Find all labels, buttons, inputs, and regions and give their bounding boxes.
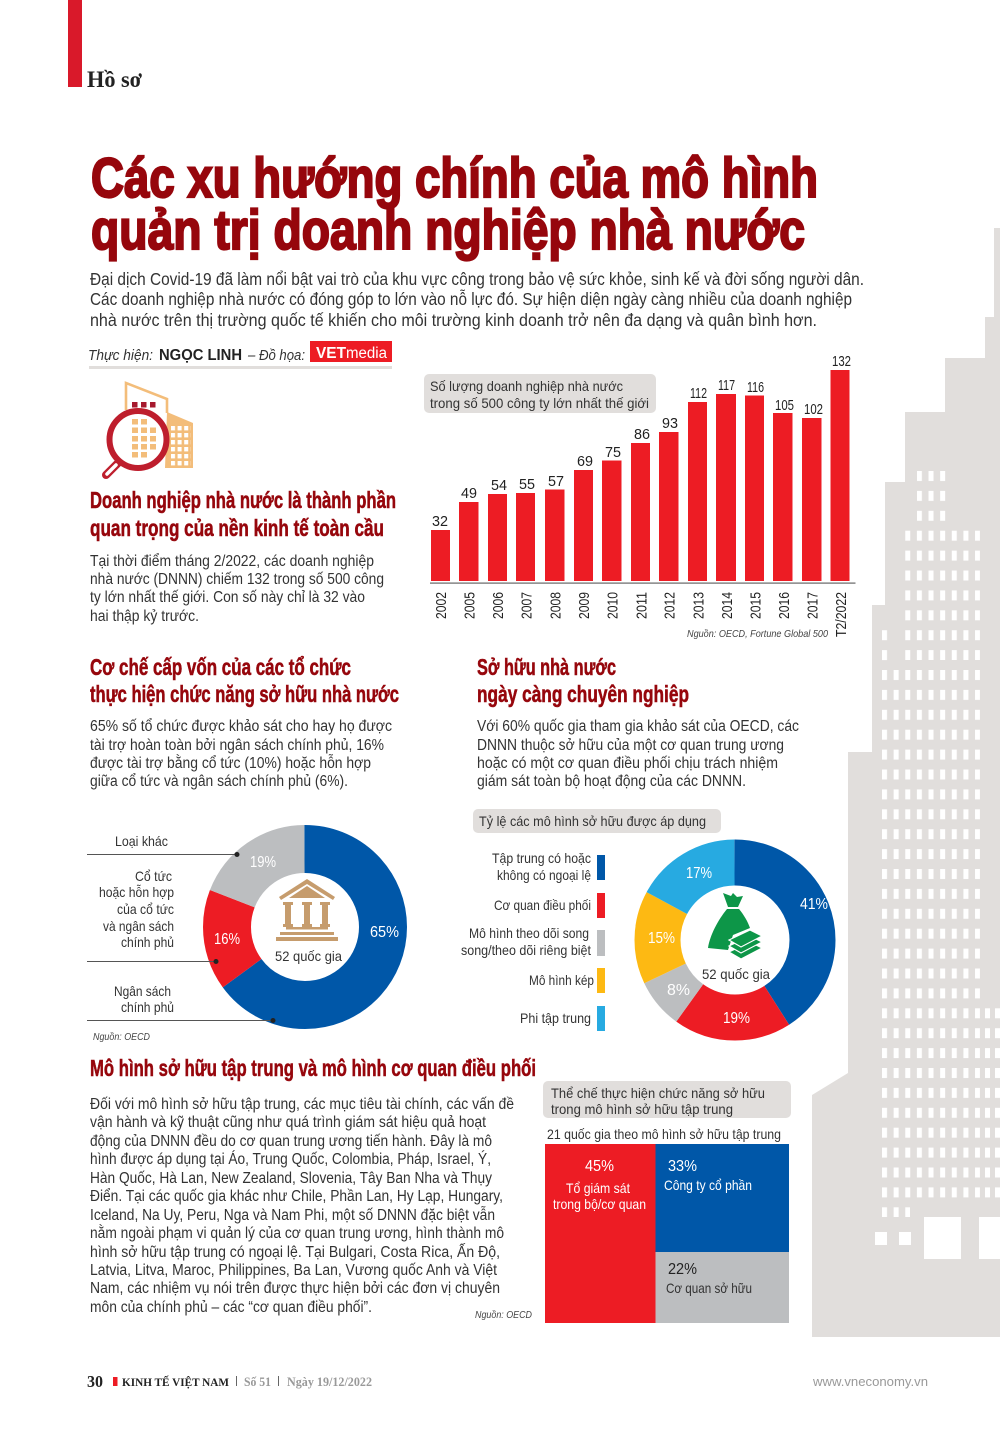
text block: state enterprises: nhà nước (DNNN) chiếm 132 trong số 500 công <box>90 571 384 588</box>
text block: state enterprises: Tại thời điểm tháng 2/2022, các doanh nghiệp <box>90 553 374 570</box>
donut chart: ownership models: 17% <box>686 865 712 882</box>
heading: funding mechanism: thực hiện chức năng sở hữu nhà nước <box>90 681 399 707</box>
bar values: 57 <box>548 474 564 490</box>
year axis labels: 2007 <box>520 592 536 619</box>
bar values: 132 <box>832 354 851 370</box>
heading: state enterprises: Doanh nghiệp nhà nước là thành phần <box>90 487 396 513</box>
year axis labels: 2002 <box>434 592 450 619</box>
legend: Mô hình kép <box>529 972 594 988</box>
donut chart: funding sources: 19% <box>250 854 276 871</box>
bars <box>431 370 850 581</box>
chart label: Tỷ lệ các mô hình sở hữu được áp dụng <box>479 813 706 829</box>
cell: 22%: 22% <box>668 1261 697 1278</box>
text block: centralized model: hình sở hữu tập trung có ngoại lệ. Tại Bulgari, Costa Rica, Ấn Độ, <box>90 1244 500 1261</box>
chart label <box>543 1081 791 1118</box>
callout: state budget <box>87 983 276 1023</box>
cell: 33%: 33% <box>668 1158 697 1175</box>
heading: professional ownership: Sở hữu nhà nước <box>477 654 616 680</box>
year axis labels: 2014 <box>720 592 736 619</box>
icon: money bag <box>708 893 762 959</box>
bar values: 54 <box>491 478 507 494</box>
donut chart: ownership models: 15% <box>648 930 675 947</box>
bar values: 102 <box>804 402 823 418</box>
source: centralized model: Nguồn: OECD <box>475 1309 532 1321</box>
heading: state enterprises <box>90 487 396 541</box>
heading: funding mechanism: Cơ chế cấp vốn của các tổ chức <box>90 654 351 680</box>
heading: centralized model: Mô hình sở hữu tập trung và mô hình cơ quan điều phối <box>90 1055 536 1081</box>
cell: 45%: Tổ giám sát <box>566 1180 630 1196</box>
bar values: 32 <box>432 514 448 530</box>
text block: funding mechanism: 65% số tổ chức được khảo sát cho hay họ được <box>90 718 392 735</box>
footer <box>87 1372 928 1391</box>
chart label: Thể chế thực hiện chức năng sở hữu <box>551 1085 765 1101</box>
callout: dividends: của cổ tức <box>117 901 174 917</box>
year axis labels: T2/2022 <box>834 592 850 637</box>
bar values: 93 <box>662 416 678 432</box>
cell: 33% <box>656 1144 789 1252</box>
year axis labels <box>434 592 850 637</box>
legend: Cơ quan điều phối <box>494 897 591 913</box>
footer: www.vneconomy.vn <box>812 1374 928 1389</box>
treemap: institutions in centralized model <box>543 1081 791 1323</box>
callout: other: Loại khác <box>115 833 168 849</box>
year axis labels: 2017 <box>806 592 822 619</box>
byline: Thực hiện: <box>88 347 153 364</box>
text block: professional ownership <box>477 718 799 790</box>
text block: funding mechanism: được tài trợ bằng cổ tức (10%) hoặc hỗn hợp <box>90 755 371 772</box>
footer: 30 <box>87 1372 103 1391</box>
bar values: 69 <box>577 454 593 470</box>
year axis labels: 2006 <box>491 592 507 619</box>
bar values: 112 <box>690 386 707 402</box>
text block: funding mechanism: tài trợ hoàn toàn bởi ngân sách chính phủ, 16% <box>90 737 384 754</box>
donut source: Nguồn: OECD <box>93 1031 150 1043</box>
chart source: Nguồn: OECD, Fortune Global 500 <box>687 628 828 640</box>
legend: Phi tập trung <box>520 1010 591 1026</box>
icon: bank <box>276 879 338 941</box>
year axis labels: 2008 <box>548 592 564 619</box>
heading: professional ownership: ngày càng chuyên nghiệp <box>477 681 689 707</box>
year axis labels: 2016 <box>777 592 793 619</box>
text block: centralized model: Hàn Quốc, Hà Lan, New Zealand, Slovenia, Tây Ban Nha và Thụy <box>90 1170 492 1187</box>
text block: centralized model: hình được áp dụng tại Áo, Trung Quốc, Colombia, Pháp, Israel, Ý, <box>90 1151 491 1168</box>
legend <box>461 850 605 1031</box>
text block: centralized model <box>90 1096 514 1316</box>
callout: dividends: và ngân sách <box>103 918 174 934</box>
cell: 22%: Cơ quan sở hữu <box>666 1280 752 1296</box>
intro text: Các doanh nghiệp nhà nước có đóng góp to lớn vào nỗ lực đó. Sự hiện diện ngày càng nhiều của doanh nghiệp <box>90 288 852 309</box>
bar chart: state enterprises in top 500 <box>424 354 856 640</box>
text block: professional ownership: hoặc có một cơ quan điều phối chịu trách nhiệm <box>477 755 778 772</box>
text block: professional ownership: DNNN thuộc sở hữu của một cơ quan trung ương <box>477 737 784 754</box>
title: Các xu hướng chính của mô hình <box>91 146 818 209</box>
bar values: 86 <box>634 427 650 443</box>
legend: Mô hình theo dõi song <box>469 925 589 941</box>
callout: state budget: chính phủ <box>121 999 174 1015</box>
donut chart: ownership models: 8% <box>667 982 690 999</box>
callout: dividends <box>87 868 218 964</box>
year axis labels: 2012 <box>662 592 678 619</box>
callout: dividends: Cổ tức <box>135 868 172 884</box>
background building silhouette <box>812 228 1000 1337</box>
byline: media <box>346 345 387 362</box>
heading: funding mechanism <box>90 654 399 707</box>
text block: centralized model: Latvia, Litva, Maroc, Philippines, Ba Lan, Vương quốc Anh và Việt <box>90 1262 498 1279</box>
text block: professional ownership: Với 60% quốc gia tham gia khảo sát của OECD, các <box>477 718 799 735</box>
callout: dividends: chính phủ <box>121 934 174 950</box>
donut chart: funding sources: 65% <box>370 924 399 941</box>
year axis labels: 2015 <box>748 592 764 619</box>
donut chart: ownership models: 52 quốc gia <box>702 966 770 982</box>
heading: state enterprises: quan trọng của nền kinh tế toàn cầu <box>90 515 384 541</box>
text block: funding mechanism <box>90 718 392 790</box>
text block: state enterprises: hai thập kỷ trước. <box>90 608 199 625</box>
text block: centralized model: động của DNNN đều do cơ quan trung ương tiến hành. Đây là mô <box>90 1133 492 1150</box>
title <box>91 146 818 261</box>
bar values: 116 <box>747 380 764 396</box>
chart label <box>424 374 656 413</box>
treemap: institutions in centralized model: 21 quốc gia theo mô hình sở hữu tập trung <box>547 1126 781 1142</box>
legend: song/theo dõi riêng biệt <box>461 942 591 958</box>
bar values: 117 <box>718 378 735 394</box>
bar values: 55 <box>519 477 535 493</box>
text block: state enterprises: ty lớn nhất thế giới. Con số này chỉ là 32 vào <box>90 589 365 606</box>
title: quản trị doanh nghiệp nhà nước <box>91 198 805 261</box>
byline: – Đồ họa: <box>247 347 305 364</box>
text block: centralized model: nằm ngoài phạm vi quản lý của cơ quan trung ương, hình thành mô <box>90 1225 504 1242</box>
text block: professional ownership: giám sát toàn bộ hoạt động của các DNNN. <box>477 773 746 790</box>
chart label: trong số 500 công ty lớn nhất thế giới <box>430 395 649 411</box>
intro text <box>90 269 864 330</box>
intro text: Đại dịch Covid-19 đã làm nổi bật vai trò của khu vực công trong bảo vệ sức khỏe, sinh kế và đời sống người dân. <box>90 269 864 289</box>
bar values: 49 <box>461 486 477 502</box>
legend: không có ngoại lệ <box>497 867 591 883</box>
legend: Tập trung có hoặc <box>492 850 591 866</box>
bar values: 105 <box>775 398 794 414</box>
footer: KINH TẾ VIỆT NAM <box>122 1374 229 1389</box>
chart label <box>473 809 721 833</box>
byline: VET <box>316 345 347 362</box>
chart label: Số lượng doanh nghiệp nhà nước <box>430 378 623 394</box>
donut chart: funding sources: 52 quốc gia <box>275 948 342 964</box>
footer: Số 51 <box>244 1374 271 1389</box>
text block: centralized model: Iceland, Na Uy, Peru, Nga và Nam Phi, một số DNNN đặc biệt vẫn <box>90 1207 495 1224</box>
cell: 45% <box>545 1144 656 1323</box>
donut chart: ownership models: 41% <box>800 896 828 913</box>
donut chart: ownership models <box>461 809 828 1031</box>
bar values <box>432 354 851 530</box>
year axis labels: 2013 <box>692 592 708 619</box>
year axis labels: 2005 <box>462 592 478 619</box>
cell: 45%: 45% <box>585 1158 614 1175</box>
chart label: trong mô hình sở hữu tập trung <box>551 1101 733 1117</box>
callout: dividends: hoặc hỗn hợp <box>99 884 174 900</box>
section tab <box>68 0 142 92</box>
icon: magnifier over buildings <box>106 383 193 475</box>
year axis labels: 2011 <box>634 592 650 619</box>
section tab: Hồ sơ <box>87 67 142 92</box>
cell: 33%: Công ty cổ phần <box>664 1177 752 1193</box>
intro text: nhà nước trên thị trường quốc tế khiến cho môi trường kinh doanh trở nên đa dạng và quân bình hơn. <box>90 310 817 330</box>
donut chart: ownership models: 19% <box>723 1010 750 1027</box>
text block: centralized model: Nam, các nhiệm vụ nói trên được thực hiện bởi các đơn vị chuyên <box>90 1280 500 1297</box>
donut chart: funding sources: 16% <box>214 931 240 948</box>
text block: funding mechanism: giữa cổ tức và ngân sách chính phủ (6%). <box>90 773 348 790</box>
text block: centralized model: Điển. Tại các quốc gia khác như Chile, Phần Lan, Hy Lạp, Hungary, <box>90 1188 503 1205</box>
cell: 22% <box>656 1252 789 1323</box>
year axis labels: 2010 <box>606 592 622 619</box>
cell: 45%: trong bộ/cơ quan <box>553 1196 646 1212</box>
callout: state budget: Ngân sách <box>114 983 171 999</box>
bar values: 75 <box>605 445 621 461</box>
text block: centralized model: Đối với mô hình sở hữu tập trung, các mục tiêu tài chính, các vấn đề <box>90 1096 514 1113</box>
heading: professional ownership <box>477 654 689 707</box>
footer: Ngày 19/12/2022 <box>287 1374 372 1389</box>
callout: other <box>87 833 240 857</box>
donut chart: funding sources <box>87 833 399 1043</box>
text block: state enterprises <box>90 553 384 625</box>
text block: centralized model: vận hành và kỹ thuật cũng như quá trình giám sát hiệu quả hoạt <box>90 1114 487 1131</box>
byline: NGỌC LINH <box>159 347 242 364</box>
byline <box>88 341 392 369</box>
year axis labels: 2009 <box>577 592 593 619</box>
text block: centralized model: môn của chính phủ – các “cơ quan điều phối”. <box>90 1299 372 1316</box>
